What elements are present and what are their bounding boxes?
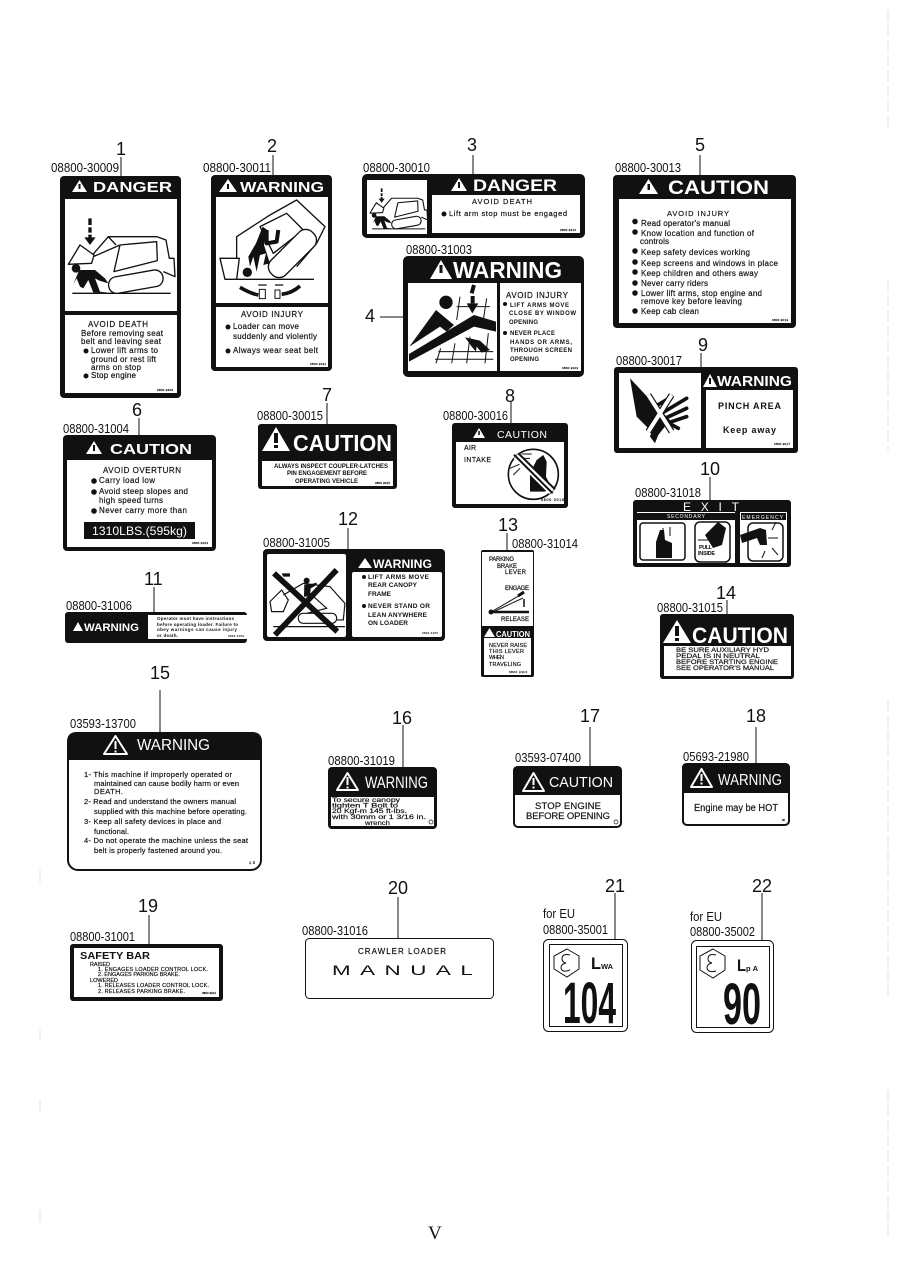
instruction text: LOWERED <box>90 978 118 984</box>
pinch text: Keep away <box>723 425 776 435</box>
label 21: LWA 104 noise decal <box>543 876 628 1036</box>
callout 8 with part number <box>443 386 515 423</box>
icon: hand on latch <box>640 523 685 560</box>
callout 5 with part number <box>615 135 705 175</box>
pinch text: 0800 3017 <box>774 442 790 446</box>
text and lever diagram: BRAKE <box>497 564 517 570</box>
callout 20 with part number: 08800-31016 <box>302 923 368 938</box>
instruction text: THROUGH SCREEN <box>510 348 572 354</box>
decal body: WARNING <box>717 373 792 390</box>
instruction text: 0800 3104 <box>192 541 208 545</box>
illustration: arm caught by lift arm <box>409 285 496 363</box>
callout 8 with part number: 8 <box>505 386 515 406</box>
callout 17 with part number: 17 <box>580 706 600 726</box>
text and lever diagram: ENGAGE <box>505 586 529 592</box>
instruction text: NEVER STAND OR <box>368 603 430 610</box>
sound level value: pA <box>746 964 759 973</box>
callout 18 with part number: 18 <box>746 706 766 726</box>
decal body: 0800 3016 <box>541 498 564 502</box>
illustration: person crushed by loader arm <box>68 218 175 295</box>
callout 16 with part number: 16 <box>392 708 412 728</box>
callout 1 with part number: 08800-30009 <box>51 160 119 175</box>
text and lever diagram: WHEN <box>489 655 504 661</box>
label 1: danger, avoid death <box>51 139 181 398</box>
illustration: crossed-out hand <box>630 378 687 443</box>
instruction text: CLOSE BY WINDOW <box>509 311 576 317</box>
numbered rules: 4- Do not operate the machine unless the seat <box>84 836 249 845</box>
label 14: caution, auxiliary pedal <box>657 583 794 679</box>
instruction text: FRAME <box>368 591 392 598</box>
icon: hexagon with epsilon <box>554 949 579 977</box>
instruction text: 0800 3410 <box>560 228 576 232</box>
callout 4 with part number: 08800-31003 <box>406 242 472 257</box>
decal body: CAUTION <box>497 429 547 441</box>
decal body: DANGER <box>93 179 172 196</box>
decal body: AIR <box>464 445 476 452</box>
instruction text: Lift arm stop must be engaged <box>449 209 567 218</box>
text and lever diagram: LEVER <box>505 570 527 576</box>
icon: hexagon with epsilon <box>700 949 725 978</box>
callout 21 with part number: 21 <box>605 876 625 896</box>
sound level value <box>723 956 761 1037</box>
callout 13 with part number: 13 <box>498 515 518 535</box>
instruction text <box>362 574 438 635</box>
decal body: WARNING <box>718 772 782 789</box>
decal body <box>452 423 568 508</box>
label 19: safety bar <box>70 896 223 1001</box>
callout 11 with part number <box>66 569 163 613</box>
numbered rules: functional. <box>94 827 129 836</box>
instruction text: HANDS OR ARMS, <box>510 340 572 346</box>
pinch text <box>718 401 790 446</box>
instruction text <box>80 951 216 995</box>
callout 11 with part number: 08800-31006 <box>66 598 132 613</box>
callout 20 with part number <box>302 878 408 938</box>
instruction list: controls <box>640 237 669 246</box>
decal body: EXIT <box>683 500 740 514</box>
instruction text: suddenly and violently <box>233 332 317 341</box>
decal body <box>544 940 628 1032</box>
callout 6 with part number: 6 <box>132 400 142 420</box>
instruction text: 0800 3411 <box>310 362 326 366</box>
icon: no ether spray <box>508 449 558 499</box>
decal body: CAUTION <box>692 623 788 648</box>
callout 1 with part number <box>51 139 126 176</box>
instruction list: Never carry riders <box>641 279 708 288</box>
decal body: CAUTION <box>293 430 392 456</box>
instruction text: high speed turns <box>99 496 163 505</box>
callout 5 with part number: 08800-30013 <box>615 160 681 175</box>
sound level value: 90 <box>723 972 761 1037</box>
callout 8 with part number: 08800-30016 <box>443 408 508 423</box>
callout 4 with part number <box>365 242 472 326</box>
instruction text: 2. RELEASES PARKING BRAKE. <box>98 989 185 995</box>
label 17: caution, stop engine <box>513 706 622 827</box>
callout 5 with part number: 5 <box>695 135 705 155</box>
instruction text: ALWAYS INSPECT COUPLER-LATCHES <box>274 464 388 470</box>
torque instruction text <box>331 797 433 827</box>
callout 22 with part number: 08800-35002 <box>690 924 755 939</box>
instruction text <box>274 464 390 485</box>
label 3: danger, lift arm stop <box>362 135 585 238</box>
callout 2 with part number: 2 <box>267 136 277 156</box>
instruction text: Operator must have instructions <box>157 616 234 621</box>
decal body: CAUTION <box>668 178 769 199</box>
instruction text: 1310LBS.(595kg) <box>92 524 187 538</box>
callout 10 with part number <box>635 459 720 500</box>
callout 21 with part number: 08800-35001 <box>543 922 608 937</box>
callout 13 with part number <box>498 515 578 551</box>
label 5: caution, avoid injury list <box>613 135 796 328</box>
instruction list: Keep safety devices working <box>641 248 750 257</box>
callout 15 with part number: 03593-13700 <box>70 716 136 731</box>
callout 3 with part number <box>363 135 477 175</box>
callout 14 with part number: 08800-31015 <box>657 600 723 615</box>
decal body <box>65 612 247 643</box>
callout 17 with part number: 03593-07400 <box>515 750 581 765</box>
instruction text: obey warnings can cause injury <box>157 627 237 632</box>
torque instruction text: tighten T Bolt to <box>332 802 399 810</box>
instruction text: AVOID DEATH <box>472 197 532 206</box>
decal body: WARNING <box>84 622 139 634</box>
label 16: warning, canopy bolt <box>328 708 437 829</box>
numbered rules: DEATH. <box>94 787 123 796</box>
decal body <box>211 175 332 371</box>
callout 10 with part number: 10 <box>700 459 720 479</box>
numbered rules: 15 <box>249 860 256 865</box>
numbered rules: maintained can cause bodily harm or even <box>94 779 239 788</box>
instruction text: 2. ENGAGES PARKING BRAKE. <box>98 972 180 978</box>
callout 12 with part number <box>263 509 358 550</box>
numbered rules <box>84 770 256 865</box>
sound level value: WA <box>601 962 614 971</box>
decal body: DANGER <box>473 176 557 195</box>
label 2: warning, avoid injury <box>203 136 332 371</box>
callout 18 with part number: 05693-21980 <box>683 749 749 764</box>
icon: pull inside handle <box>695 522 730 562</box>
decal body: MANUAL <box>332 962 473 978</box>
instruction text <box>694 803 785 822</box>
torque instruction text: To secure canopy <box>332 797 401 804</box>
instruction list: Keep screens and windows in place <box>641 259 779 268</box>
callout 20 with part number: 20 <box>388 878 408 898</box>
callout 16 with part number <box>328 708 412 768</box>
instruction text: Carry load low <box>99 476 155 485</box>
instruction text: OPERATING VEHICLE <box>295 479 358 485</box>
callout 22 with part number: 22 <box>752 876 772 896</box>
pinch text: PINCH AREA <box>718 401 782 411</box>
callout 15 with part number <box>70 663 170 732</box>
instruction list: AVOID INJURY <box>667 209 729 218</box>
decal body <box>67 732 262 870</box>
text and lever diagram: 0800 3114 <box>509 670 527 674</box>
instruction text: SAFETY BAR <box>80 951 151 962</box>
instruction text: OPENING <box>510 357 539 363</box>
instruction text <box>157 616 244 638</box>
instruction text: Loader can move <box>233 322 300 331</box>
decal body: CAUTION <box>549 774 613 791</box>
decal body <box>263 549 445 641</box>
callout 7 with part number: 7 <box>322 385 332 405</box>
label 4: warning, hands through screen <box>365 242 584 377</box>
callout 14 with part number: 14 <box>716 583 736 603</box>
instruction text: PEDAL IS IN NEUTRAL <box>676 653 760 660</box>
decal body: WARNING <box>137 737 210 754</box>
instruction text: 0800 3103 <box>562 366 578 370</box>
decal body <box>692 940 774 1032</box>
instruction text: Lower lift arms to <box>91 346 159 355</box>
sound level value: L <box>737 956 746 975</box>
callout 9 with part number <box>616 335 708 368</box>
instruction text: 0800 3409 <box>157 388 173 392</box>
callout 11 with part number: 11 <box>144 569 163 589</box>
instruction list: Lower lift arms, stop engine and <box>641 289 762 298</box>
callout 7 with part number <box>257 385 332 424</box>
callout 22 with part number <box>690 876 772 940</box>
instruction text: SEE OPERATOR'S MANUAL <box>676 665 774 672</box>
instruction text: Engine may be HOT <box>694 803 778 814</box>
torque instruction text: with 30mm or 1 3/16 in. <box>331 814 426 821</box>
instruction text <box>81 320 173 392</box>
instruction text: AVOID INJURY <box>241 310 304 319</box>
illustration: crossed-out rider on loader <box>270 570 345 635</box>
callout 14 with part number <box>657 583 736 615</box>
callout 2 with part number: 08800-30011 <box>203 160 271 175</box>
sound level value: L <box>591 954 601 973</box>
label 6: caution, avoid overturn <box>63 400 216 551</box>
instruction text: NEVER PLACE <box>510 331 555 337</box>
label 13: parking brake lever <box>481 515 578 677</box>
sound level value <box>563 954 616 1036</box>
decal body <box>70 944 223 1001</box>
callout 15 with part number: 15 <box>150 663 170 683</box>
label 10: exit instructions <box>633 459 791 567</box>
decal body: WARNING <box>373 557 432 571</box>
numbered rules: 3- Keep all safety devices in place and <box>84 817 221 826</box>
instruction text: ground or rest lift <box>91 355 157 364</box>
instruction text: ON LOADER <box>368 620 408 627</box>
decal body <box>614 367 798 453</box>
instruction text: LEAN ANYWHERE <box>368 612 428 619</box>
instruction text: BE SURE AUXILIARY HYD <box>676 647 769 654</box>
decal body <box>60 176 181 398</box>
text and lever diagram <box>488 557 529 674</box>
instruction text: AVOID INJURY <box>506 291 569 300</box>
instruction text: 1. ENGAGES LOADER CONTROL LOCK. <box>98 967 208 973</box>
instruction text: Always wear seat belt <box>233 346 319 355</box>
label 22: LpA 90 noise decal <box>690 876 774 1037</box>
page number: V <box>428 1223 442 1244</box>
instruction text <box>676 647 779 672</box>
instruction text: BEFORE STARTING ENGINE <box>676 659 779 666</box>
instruction text: or death. <box>157 633 178 638</box>
label 7: caution, coupler latches <box>257 385 397 489</box>
instruction text: 0800 3106 <box>228 634 244 638</box>
callout 9 with part number: 08800-30017 <box>616 353 682 368</box>
decal body: WARNING <box>453 257 562 283</box>
text and lever diagram: TRAVELING <box>489 662 521 668</box>
instruction text <box>442 197 576 232</box>
callout 7 with part number: 08800-30015 <box>257 408 323 423</box>
instruction text: OPENING <box>509 320 538 326</box>
instruction text <box>226 310 326 366</box>
icon: emergency window push <box>740 522 783 561</box>
callout 12 with part number: 08800-31005 <box>263 535 330 550</box>
instruction text: RAISED <box>90 962 110 968</box>
callout 22 with part number: for EU <box>690 909 722 924</box>
callout 6 with part number <box>63 400 142 436</box>
callout 21 with part number: for EU <box>543 906 575 921</box>
label 9: warning, pinch area <box>614 335 798 453</box>
instruction list: remove key before leaving <box>641 297 742 306</box>
instruction text: Never carry more than <box>99 506 187 515</box>
decal body <box>306 938 494 998</box>
sound level value: 104 <box>563 971 616 1036</box>
decal body <box>63 435 216 551</box>
instruction text: 1. RELEASES LOADER CONTROL LOCK. <box>98 983 209 989</box>
instruction text: before operating loader. Failure to <box>157 622 238 627</box>
callout 6 with part number: 08800-31004 <box>63 421 129 436</box>
instruction list: 0800 3013 <box>772 318 788 322</box>
instruction text: REAR CANOPY <box>368 582 418 589</box>
instruction text: AVOID DEATH <box>88 320 148 329</box>
numbered rules: belt is properly fastened around you. <box>94 846 222 855</box>
callout 19 with part number <box>70 896 158 944</box>
label 11: warning strip <box>65 569 247 643</box>
torque instruction text: 20 Kgf-m 145 ft-lbs. <box>332 808 407 815</box>
callout 10 with part number: 08800-31018 <box>635 485 701 500</box>
instruction text: LIFT ARMS MOVE <box>368 574 430 581</box>
decal body: INTAKE <box>464 457 491 464</box>
instruction text: w <box>782 817 785 822</box>
text and lever diagram: THIS LEVER <box>489 649 524 655</box>
callout 16 with part number: 08800-31019 <box>328 753 395 768</box>
callout 2 with part number <box>203 136 277 175</box>
label 18: warning, engine hot <box>682 706 790 825</box>
instruction list: Keep children and others away <box>641 269 758 278</box>
text and lever diagram: NEVER RAISE <box>489 643 527 649</box>
decal body: CAUTION <box>110 441 192 458</box>
numbered rules: 2- Read and understand the owners manual <box>84 797 236 806</box>
instruction text: 0800 3015 <box>375 481 390 485</box>
illustration: small loader <box>370 188 428 230</box>
callout 9 with part number: 9 <box>698 335 708 355</box>
icon: pull inside handle: INSIDE <box>698 551 715 557</box>
decal body: CAUTION <box>496 630 530 639</box>
instruction text: PIN ENGAGEMENT BEFORE <box>287 471 367 477</box>
callout 17 with part number <box>515 706 600 766</box>
icon: pull inside handle: PULL <box>699 545 713 551</box>
callout 13 with part number: 08800-31014 <box>512 536 578 551</box>
decal body: CRAWLER LOADER <box>358 947 446 956</box>
instruction text <box>503 291 578 370</box>
instruction text <box>526 801 618 824</box>
decal body <box>481 550 534 677</box>
instruction list <box>635 209 788 322</box>
label 8: caution, air intake <box>443 386 568 508</box>
callout 18 with part number <box>683 706 766 764</box>
decal body: WARNING <box>365 773 428 792</box>
text and lever diagram: RELEASE <box>501 617 529 623</box>
decal body: EMERGENCY <box>742 515 784 521</box>
callout 4 with part number: 4 <box>365 306 375 326</box>
instruction list: Read operator's manual <box>641 219 730 228</box>
decal body <box>633 500 791 567</box>
decal body <box>403 256 584 377</box>
instruction text: Before removing seat <box>81 329 164 338</box>
text and lever diagram: PARKING <box>489 557 514 563</box>
callout 19 with part number: 19 <box>138 896 158 916</box>
decal body <box>362 174 585 238</box>
callout 3 with part number: 08800-30010 <box>363 160 430 175</box>
instruction text: STOP ENGINE <box>535 801 601 812</box>
instruction list: Keep cab clean <box>641 307 699 316</box>
instruction text: 0800 3105 <box>422 631 438 635</box>
decal body: SECONDARY <box>667 514 706 520</box>
label 12: warning, do not stand on loader <box>263 509 445 641</box>
instruction text: 0800 3101 <box>202 991 216 995</box>
instruction text: Stop engine <box>91 371 137 380</box>
instruction list: Know location and function of <box>641 229 755 238</box>
instruction text: belt and leaving seat <box>81 337 162 346</box>
torque instruction text: wrench <box>364 820 390 827</box>
callout 19 with part number: 08800-31001 <box>70 929 135 944</box>
decal body <box>613 175 796 328</box>
callout 3 with part number: 3 <box>467 135 477 155</box>
callout 1 with part number: 1 <box>116 139 126 159</box>
callout 21 with part number <box>543 876 625 939</box>
instruction text: LIFT ARMS MOVE <box>510 303 569 309</box>
label 20: crawler loader manual <box>302 878 494 998</box>
instruction text: Avoid steep slopes and <box>99 487 188 496</box>
callout 12 with part number: 12 <box>338 509 358 529</box>
numbered rules: 1- This machine if improperly operated or <box>84 770 232 779</box>
instruction text <box>84 466 208 545</box>
illustration: tipped loader with operator <box>220 200 325 299</box>
decal body: WARNING <box>240 179 324 196</box>
instruction text: arms on stop <box>91 363 142 372</box>
instruction text: AVOID OVERTURN <box>103 466 181 475</box>
label 15: warning, four rules <box>67 663 262 870</box>
numbered rules: supplied with this machine before operating. <box>94 807 247 816</box>
instruction text: BEFORE OPENING <box>526 811 610 822</box>
